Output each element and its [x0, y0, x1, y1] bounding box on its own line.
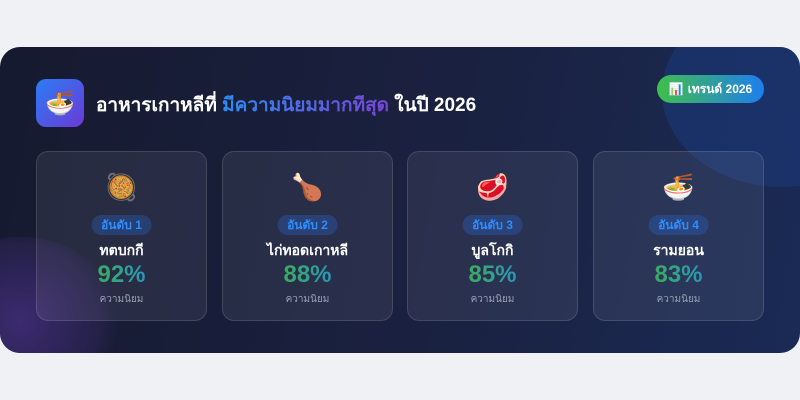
card 4	[593, 151, 764, 321]
card 4: 83%	[654, 261, 703, 288]
card 3: 85%	[468, 261, 517, 288]
title: อาหารเกาหลีที่ มีความนิยมมากที่สุด ในปี 2026	[96, 95, 476, 116]
card 3: 🥩	[476, 172, 509, 202]
card 2: อันดับ 2	[287, 218, 328, 232]
card 3: อันดับ 3	[472, 218, 513, 232]
card 3	[407, 151, 578, 321]
card 4: ความนิยม	[657, 294, 700, 305]
card 4: รามยอน	[653, 242, 704, 258]
card 2: ไก่ทอดเกาหลี	[267, 242, 348, 258]
card 4: อันดับ 4	[658, 218, 699, 232]
card 3: บูลโกกิ	[472, 242, 513, 258]
card 2: 🍗	[291, 172, 324, 202]
card 1: ทตบกกี	[99, 242, 144, 258]
badge: trend 2026: 📊	[669, 82, 684, 96]
icon: noodle bowl: 🍜	[45, 90, 75, 116]
card 1: 🥘	[105, 172, 138, 202]
icon: noodle bowl	[36, 79, 84, 127]
card 1: 92%	[97, 261, 146, 288]
card 3: ความนิยม	[471, 294, 514, 305]
card 1: อันดับ 1	[101, 218, 142, 232]
panel: main	[0, 47, 800, 353]
card 2	[222, 151, 393, 321]
badge: trend 2026: เทรนด์ 2026	[688, 82, 752, 96]
card 1: ความนิยม	[100, 294, 143, 305]
card 2: 88%	[283, 261, 332, 288]
badge: trend 2026	[657, 75, 764, 103]
card 1	[36, 151, 207, 321]
card 4: 🍜	[662, 172, 695, 202]
card 2: ความนิยม	[286, 294, 329, 305]
